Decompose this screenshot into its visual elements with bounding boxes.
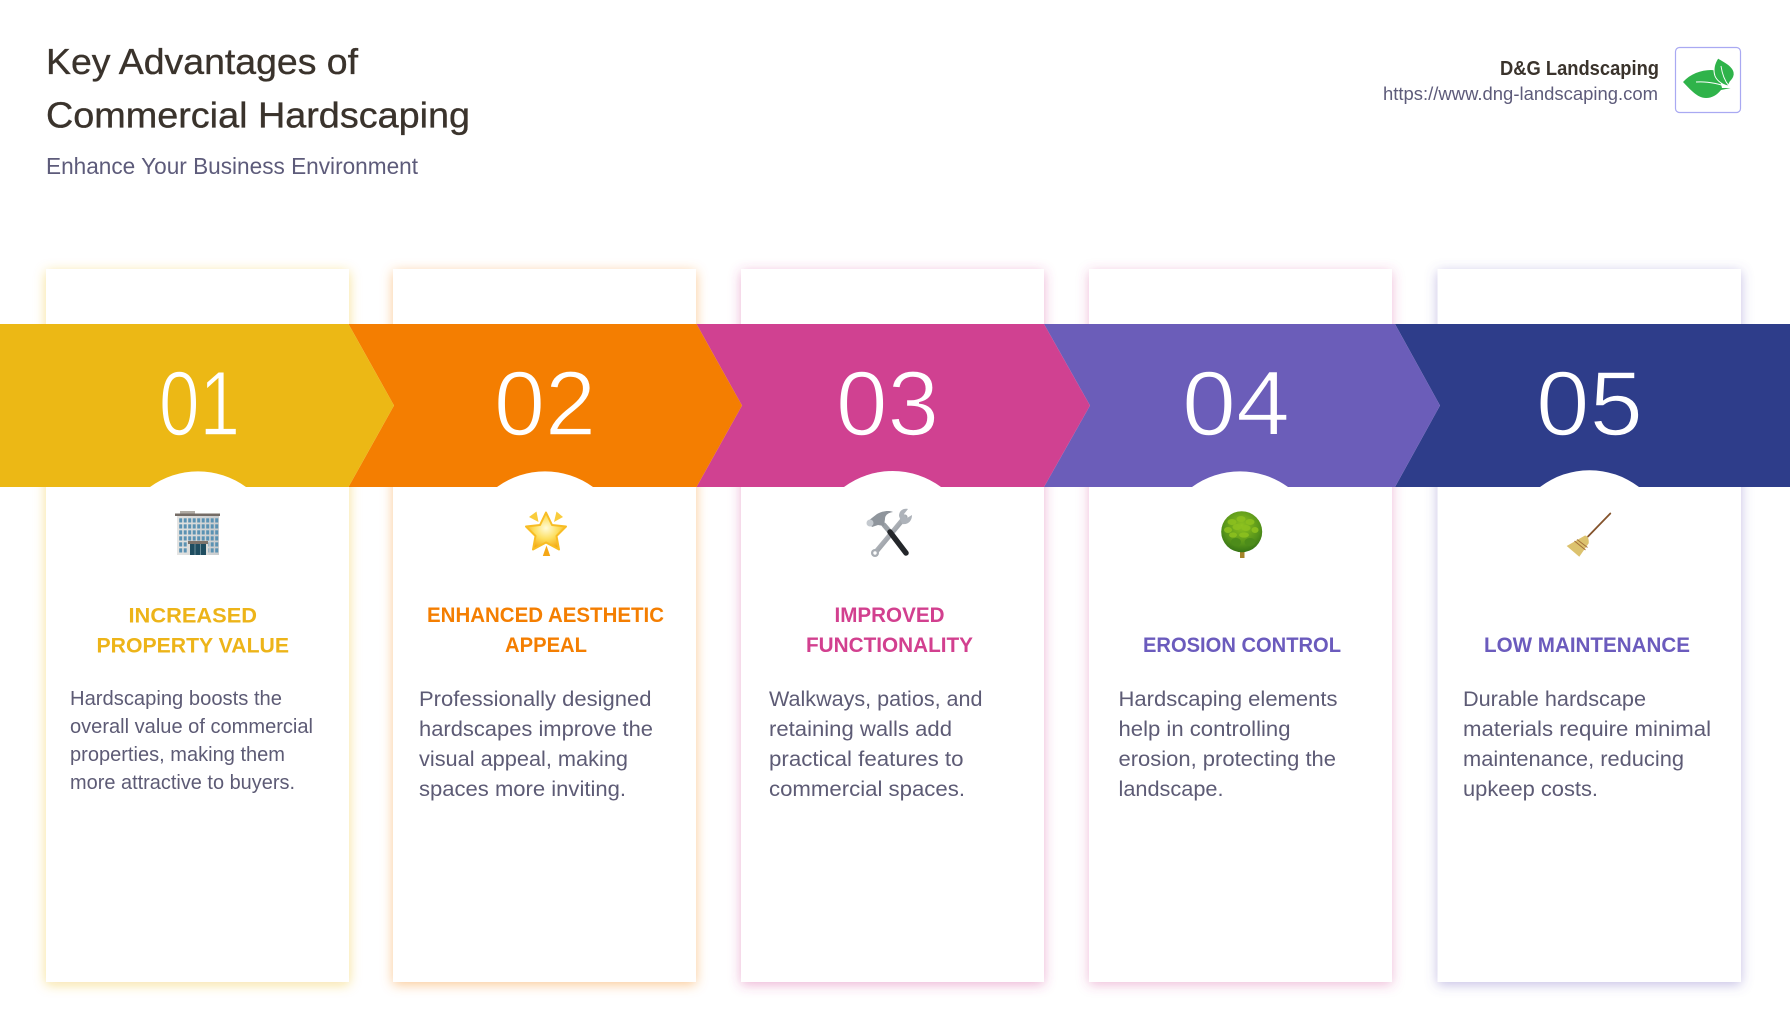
description [1118, 687, 1338, 801]
description: practical features to [769, 747, 964, 771]
panel: increased property value [46, 269, 349, 982]
panel: erosion control [1089, 269, 1392, 982]
arrow 04: 04 [1182, 353, 1290, 455]
icon: leaves logo [1683, 58, 1734, 98]
panel: low maintenance [1438, 269, 1741, 982]
heading [427, 604, 664, 657]
description: erosion, protecting the [1118, 747, 1336, 771]
description: Hardscaping boosts the [70, 687, 282, 710]
arrow 02: 02 [494, 353, 596, 455]
arrow 03 [696, 324, 1090, 487]
panel: improved functionality [741, 269, 1044, 982]
arrow 05 [1395, 324, 1790, 487]
arrow 05: 05 [1536, 353, 1643, 455]
circular notches [150, 470, 1639, 487]
brand url: https://www.dng-landscaping.com [1383, 84, 1658, 104]
description: Hardscaping elements [1118, 687, 1338, 711]
brand block [1383, 48, 1740, 112]
description: spaces more inviting. [419, 777, 626, 801]
icon: tree [1221, 511, 1262, 558]
subtitle: Enhance Your Business Environment [46, 153, 419, 179]
heading [806, 604, 973, 657]
icon: office building [175, 511, 220, 555]
arrow 01: 01 [159, 353, 240, 455]
heading: ENHANCED AESTHETIC [427, 604, 664, 627]
heading: EROSION CONTROL [1143, 634, 1341, 657]
heading: IMPROVED [834, 604, 944, 627]
description: visual appeal, making [419, 747, 628, 771]
arrow 04 [1044, 324, 1440, 487]
description: materials require minimal [1463, 717, 1711, 741]
description: properties, making them [70, 743, 285, 766]
title: Key Advantages of [46, 41, 359, 82]
arrow band [0, 324, 1790, 487]
description [1463, 687, 1711, 801]
description [419, 687, 653, 801]
description: more attractive to buyers. [70, 771, 295, 794]
description: overall value of commercial [70, 715, 313, 738]
description: commercial spaces. [769, 777, 965, 801]
heading [96, 604, 289, 658]
description: Walkways, patios, and [769, 687, 982, 711]
brand name: D&G Landscaping [1500, 58, 1659, 80]
logo box [1676, 48, 1740, 112]
description: retaining walls add [769, 717, 952, 741]
heading: LOW MAINTENANCE [1484, 634, 1690, 657]
description [769, 687, 982, 801]
heading: FUNCTIONALITY [806, 634, 973, 657]
description: upkeep costs. [1463, 777, 1598, 801]
description: help in controlling [1118, 717, 1290, 741]
heading: APPEAL [505, 634, 587, 657]
title [46, 41, 470, 136]
icon: broom [1567, 514, 1610, 557]
arrow 03: 03 [836, 353, 939, 455]
description: Durable hardscape [1463, 687, 1646, 711]
panel: enhanced aesthetic appeal [393, 269, 696, 982]
description: maintenance, reducing [1463, 747, 1684, 771]
description [70, 687, 313, 794]
icon: glowing star [526, 512, 566, 556]
arrow 02 [348, 324, 742, 487]
description: Professionally designed [419, 687, 652, 711]
heading: INCREASED [128, 604, 257, 628]
description: hardscapes improve the [419, 717, 653, 741]
title: Commercial Hardscaping [46, 94, 470, 136]
description: landscape. [1118, 777, 1224, 801]
arrow 01 [0, 324, 394, 487]
icon: hammer and wrench [866, 509, 912, 557]
heading: PROPERTY VALUE [96, 634, 289, 658]
